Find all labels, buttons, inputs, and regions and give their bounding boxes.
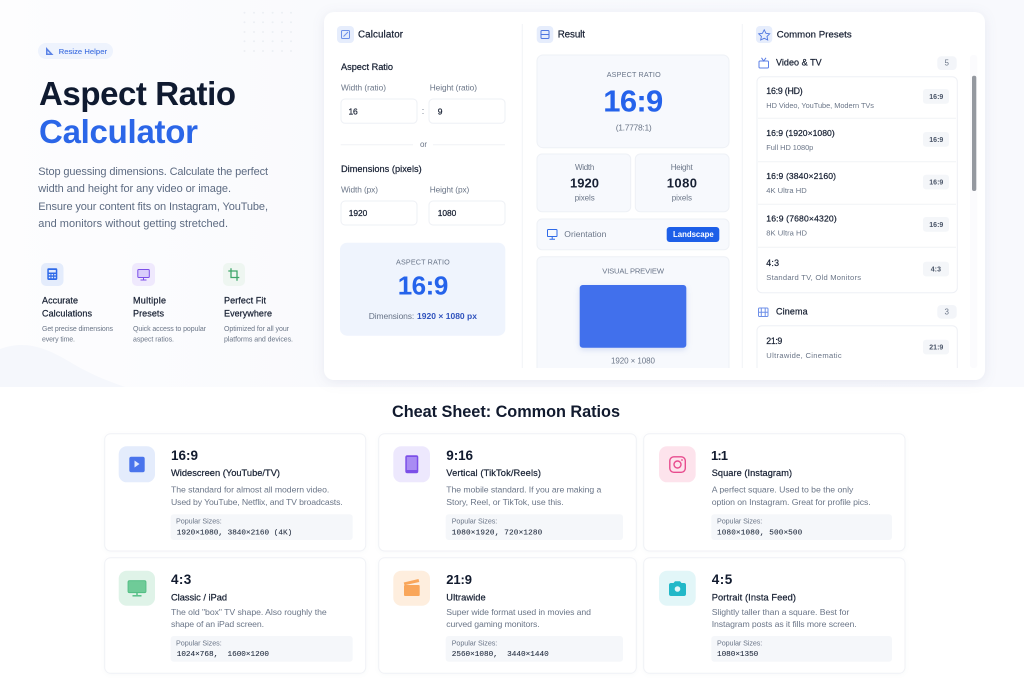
- feature: Multiple Presets: aspect ratios.: [133, 336, 174, 344]
- card: 21:9: curved gaming monitors.: [446, 619, 540, 629]
- group heading: Video and TV: [759, 56, 957, 70]
- card: 9:16: The mobile standard. If you are making a: [446, 485, 601, 495]
- preset: 3840x2160: 16:9 (3840×2160): [766, 171, 836, 181]
- aspect ratio inputs: Aspect Ratio: [341, 62, 393, 72]
- presets heading: Common Presets: [777, 30, 852, 41]
- or divider: or: [420, 140, 427, 149]
- group heading: Video and TV: Video & TV: [776, 58, 822, 68]
- preset: 1920x1080: Full HD 1080p: [766, 143, 813, 152]
- dimension inputs: Height (px): [430, 184, 470, 194]
- card: 1:1: Square (Instagram): [712, 468, 792, 478]
- orientation row: Orientation: [564, 229, 607, 239]
- card: 16:9: 1920×1080, 3840×2160 (4K): [177, 529, 292, 537]
- scrollbar: [972, 76, 976, 191]
- card: 1:1: option on Instagram. Great for profile pics.: [712, 497, 871, 507]
- intro paragraph: [37, 166, 268, 230]
- result ratio card: [537, 55, 729, 148]
- preset: 4:3: [766, 258, 949, 282]
- aspect ratio inputs: [341, 62, 505, 123]
- icon: camera: [659, 571, 696, 606]
- card: 21:9: 2560×1080, 3440×1440: [452, 651, 549, 659]
- badge: Resize Helper: Resize Helper: [59, 47, 107, 56]
- card: 21:9: Super wide format used in movies and: [446, 607, 591, 617]
- aspect ratio inputs: :: [422, 106, 424, 116]
- feature: Accurate Calculations: Get precise dimensions: [42, 326, 114, 333]
- card: 21:9: Ultrawide: [446, 593, 486, 603]
- icon: film: [758, 308, 768, 316]
- result ratio card: 16:9: [603, 84, 663, 119]
- card: 4:3: Classic / iPad: [171, 593, 227, 603]
- presets heading: [756, 26, 852, 43]
- height card: pixels: [672, 194, 692, 203]
- aspect ratio output box: 1920 × 1080 px: [417, 311, 477, 321]
- result ratio card: ASPECT RATIO: [607, 70, 661, 79]
- group heading: Video and TV: 5: [944, 58, 950, 67]
- card: 9:16: 9:16: [446, 448, 473, 463]
- card: 9:16: Vertical (TikTok/Reels): [446, 468, 541, 478]
- feature: Perfect Fit Everywhere: Optimized for all your: [224, 326, 290, 333]
- feature: Perfect Fit Everywhere: [223, 263, 293, 344]
- card: 9:16: Story, Reel, or TikTok, use this.: [446, 497, 564, 507]
- card: 21:9: Popular Sizes:: [452, 639, 497, 648]
- badge: Resize Helper: [38, 43, 113, 59]
- group heading: Cinema: [758, 305, 957, 319]
- calculator heading: Calculator: [358, 30, 404, 41]
- card: 16:9: Used by YouTube, Netflix, and TV broadcasts.: [171, 497, 343, 507]
- feature: Accurate Calculations: every time.: [42, 336, 75, 344]
- icon: monitor: [132, 263, 155, 286]
- group heading: Cinema: 3: [944, 308, 950, 316]
- card: 21:9: [379, 558, 636, 673]
- preset: 4:3: 4:3: [766, 258, 779, 268]
- preset: 7680x4320: [766, 215, 949, 236]
- height card: Height: [671, 163, 693, 172]
- icon: tv: [759, 58, 768, 68]
- panel: calculator: [337, 26, 505, 336]
- intro paragraph: Ensure your content fits on Instagram, YouTube,: [38, 201, 268, 213]
- width card: 1920: [570, 176, 599, 191]
- card: 9:16: Popular Sizes:: [452, 517, 497, 526]
- preset: 4:3: 4:3: [931, 267, 941, 274]
- card: 16:9: 16:9: [171, 448, 198, 463]
- aspect ratio output box: 16:9: [398, 270, 448, 300]
- orientation row: Landscape: [673, 230, 714, 239]
- feature: Multiple Presets: [132, 263, 207, 344]
- panel: result: [537, 26, 729, 382]
- dimension inputs: 1080: [438, 208, 457, 218]
- icon: phone: [393, 446, 430, 482]
- card: 4:5: 1080×1350: [717, 651, 759, 659]
- card: 1:1: 1080×1080, 500×500: [717, 529, 803, 537]
- card: 1:1: 1:1: [711, 448, 728, 463]
- card: 4:3: 4:3: [171, 572, 192, 587]
- feature: Multiple Presets: Quick access to popular: [133, 326, 207, 333]
- feature: Multiple Presets: Presets: [133, 308, 164, 318]
- preset: 3840x2160: 4K Ultra HD: [766, 186, 807, 195]
- width card: Width: [575, 163, 594, 172]
- dimension inputs: Dimensions (pixels): [341, 164, 422, 174]
- result heading: [537, 26, 585, 43]
- card: 4:3: [105, 558, 366, 673]
- height card: 1080: [667, 176, 697, 191]
- aspect ratio output box: Dimensions:: [369, 311, 414, 321]
- aspect ratio output box: [340, 243, 505, 336]
- card: 16:9: [105, 434, 366, 551]
- dimension inputs: 1920: [349, 208, 368, 218]
- heading: cheat sheet: Cheat Sheet: Common Ratios: [392, 403, 620, 421]
- feature: Perfect Fit Everywhere: platforms and devices.: [224, 336, 293, 344]
- cinema preset list: 21:9: [929, 345, 943, 352]
- card: 1:1: Popular Sizes:: [717, 517, 762, 526]
- icon: calculator: [41, 263, 64, 286]
- preset: 16:9 HD: [766, 86, 949, 110]
- cinema preset list: 21:9: [766, 336, 782, 346]
- result ratio card: (1.7778:1): [616, 123, 652, 133]
- card: 9:16: 1080×1920, 720×1280: [452, 529, 543, 537]
- preset: 1920x1080: [766, 128, 949, 152]
- icon: clapperboard: [393, 571, 430, 606]
- main calculator card: [324, 12, 985, 396]
- card: 4:3: 1024×768, 1600×1200: [177, 651, 269, 659]
- card: 9:16: [379, 434, 636, 551]
- preset: 7680x4320: 8K Ultra HD: [766, 229, 808, 238]
- card: 4:5: [644, 558, 905, 673]
- preset: 16:9 HD: HD Video, YouTube, Modern TVs: [766, 101, 874, 110]
- title: Calculator: [39, 113, 198, 150]
- card: 4:3: Popular Sizes:: [176, 639, 222, 648]
- preset: 7680x4320: 16:9: [929, 222, 943, 229]
- dimension inputs: Width (px): [341, 184, 378, 194]
- video and TV preset list: [757, 77, 957, 293]
- hero background: [0, 0, 1024, 387]
- preset: 1920x1080: 16:9 (1920×1080): [766, 128, 835, 138]
- aspect ratio inputs: Width (ratio): [341, 82, 386, 92]
- calculator heading: [337, 26, 404, 43]
- feature: Perfect Fit Everywhere: Everywhere: [224, 308, 272, 318]
- icon: crop: [223, 263, 245, 286]
- card: 16:9: Popular Sizes:: [176, 517, 222, 526]
- card: 4:3: shape of an iPad screen.: [171, 619, 264, 629]
- feature: Multiple Presets: Multiple: [133, 296, 166, 306]
- intro paragraph: and monitors without getting stretched.: [38, 218, 228, 230]
- dimension inputs: [341, 164, 505, 225]
- aspect ratio inputs: 16: [348, 106, 358, 116]
- card: 16:9: Widescreen (YouTube/TV): [171, 468, 280, 478]
- icon: green monitor: [119, 571, 155, 606]
- feature: Accurate Calculations: Accurate: [42, 296, 78, 306]
- intro paragraph: Stop guessing dimensions. Calculate the perfect: [38, 166, 268, 178]
- height card: [635, 154, 729, 212]
- preset: 3840x2160: [766, 172, 949, 193]
- preset: 16:9 HD: 16:9 (HD): [766, 86, 803, 96]
- aspect ratio output box: ASPECT RATIO: [396, 257, 450, 266]
- icon: monitor: [548, 230, 557, 239]
- icon: instagram: [659, 446, 696, 482]
- card: 1:1: A perfect square. Used to be the only: [712, 485, 854, 495]
- width card: [537, 154, 631, 212]
- card: 4:5: Instagram posts as it fills more screen.: [712, 619, 857, 629]
- panel: common presets: [756, 26, 977, 396]
- title: Aspect Ratio: [39, 75, 236, 112]
- preset: 16:9 HD: 16:9: [929, 94, 943, 101]
- feature: Accurate Calculations: Calculations: [42, 308, 92, 318]
- visual preview: VISUAL PREVIEW: [602, 267, 665, 276]
- card: 4:5: Portrait (Insta Feed): [712, 593, 796, 603]
- preset: 3840x2160: 16:9: [929, 180, 943, 187]
- visual preview: [537, 257, 729, 382]
- card: 4:5: 4:5: [712, 572, 733, 587]
- card: 16:9: The standard for almost all modern video.: [171, 485, 329, 495]
- card: 4:5: Popular Sizes:: [717, 639, 762, 648]
- title: [39, 75, 236, 150]
- visual preview: 1920 × 1080: [611, 357, 656, 366]
- card: 1:1: [644, 434, 905, 551]
- width card: pixels: [575, 194, 595, 203]
- feature: Perfect Fit Everywhere: Perfect Fit: [224, 296, 266, 306]
- intro paragraph: width and height for any video or image.: [37, 183, 231, 195]
- icon: video: [119, 446, 155, 482]
- result heading: Result: [558, 30, 585, 41]
- decorative dot grid: [244, 12, 292, 52]
- feature: Accurate Calculations: [41, 263, 114, 344]
- aspect ratio inputs: 9: [438, 106, 443, 116]
- cinema preset list: [756, 325, 958, 368]
- card: 4:3: The old "box" TV shape. Also roughly the: [171, 607, 327, 617]
- orientation row: [537, 219, 729, 250]
- card: 4:5: Slightly taller than a square. Best for: [712, 607, 849, 617]
- aspect ratio inputs: Height (ratio): [430, 82, 477, 92]
- card: 21:9: 21:9: [446, 572, 472, 587]
- preset: 7680x4320: 16:9 (7680×4320): [766, 214, 837, 224]
- preset: 1920x1080: 16:9: [929, 137, 943, 144]
- cinema preset list: Ultrawide, Cinematic: [766, 351, 842, 360]
- preset: 4:3: Standard TV, Old Monitors: [766, 273, 861, 282]
- group heading: Cinema: Cinema: [776, 307, 808, 317]
